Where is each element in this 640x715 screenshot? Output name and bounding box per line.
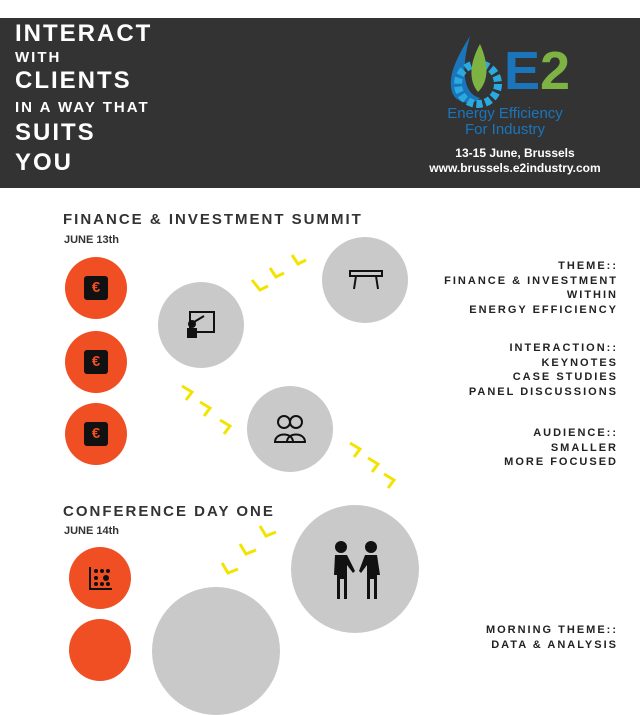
text: SMALLER: [551, 442, 618, 454]
heading: finance summit: FINANCE & INVESTMENT SUMMIT: [63, 211, 363, 228]
text: INTERACTION::: [510, 342, 618, 354]
right text blocks: THEME::: [558, 260, 618, 272]
headline: INTERACT: [15, 20, 152, 47]
headline: [15, 20, 152, 176]
logo: www.brussels.e2industry.com: [429, 161, 601, 175]
text: AUDIENCE::: [533, 427, 618, 439]
text: MORE FOCUSED: [504, 456, 618, 468]
orange icons: [65, 257, 127, 319]
headline: IN A WAY THAT: [15, 99, 150, 116]
text: JUNE 13th: [64, 234, 119, 246]
text: MORNING THEME::: [486, 624, 618, 636]
logo: E2: [504, 41, 570, 101]
text: PANEL DISCUSSIONS: [469, 386, 618, 398]
heading: conference day one: CONFERENCE DAY ONE: [63, 503, 275, 520]
headline: WITH: [15, 49, 61, 66]
logo: [429, 36, 601, 175]
right text blocks: FINANCE & INVESTMENT: [444, 274, 618, 286]
orange icons: €: [92, 279, 100, 296]
text: CASE STUDIES: [513, 371, 618, 383]
right text blocks: WITHIN: [567, 289, 618, 301]
headline: CLIENTS: [15, 67, 132, 94]
logo: 13-15 June, Brussels: [455, 146, 575, 160]
right text blocks: [444, 260, 618, 316]
gray circles: [158, 282, 244, 368]
text: DATA & ANALYSIS: [491, 638, 618, 650]
text: JUNE 14th: [64, 525, 119, 537]
text: €: [92, 353, 100, 370]
headline: SUITS: [15, 119, 96, 146]
logo: For Industry: [465, 121, 545, 138]
text: KEYNOTES: [541, 356, 618, 368]
headline: YOU: [15, 149, 73, 176]
logo: Energy Efficiency: [447, 105, 563, 122]
header band: [0, 18, 640, 188]
text: €: [92, 425, 100, 442]
right text blocks: ENERGY EFFICIENCY: [469, 304, 618, 316]
